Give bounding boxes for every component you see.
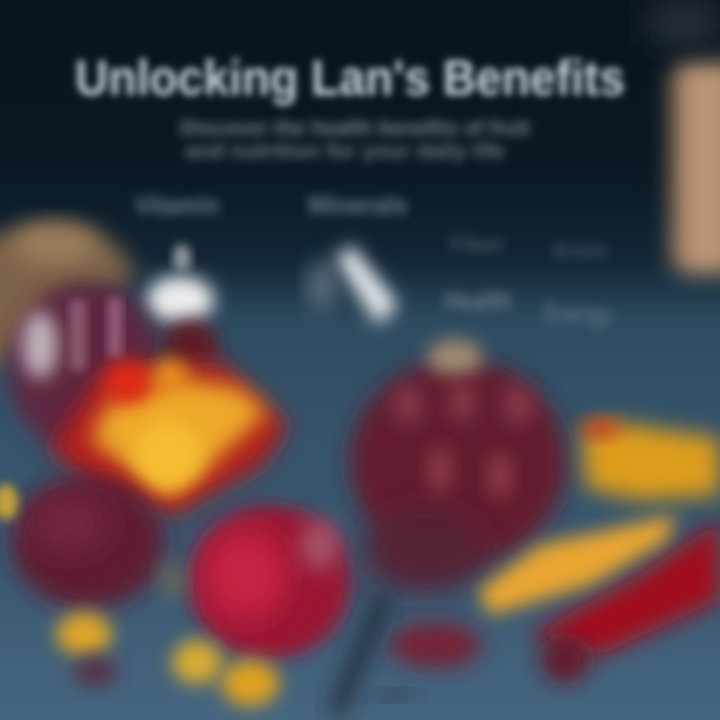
faint labels right: Energy [544,297,612,328]
white icons [146,244,398,325]
left tan object [0,222,132,380]
column labels [134,190,408,220]
faint labels right: Fiber [450,232,505,257]
subtitle: and nutrition for your daily life [185,140,505,163]
lower-left plum [12,476,164,608]
title: Unlocking Lan's Benefits [75,50,625,106]
column labels: Vitamin [134,190,220,220]
left mango slice [50,359,288,515]
top-left plum [9,283,218,453]
centre plum [190,506,350,658]
subtitle: Discover the health benefits of fruit [180,117,530,140]
right mango slices [478,418,720,682]
faint labels right: Health [444,285,512,316]
small berries and stem [335,595,481,715]
faint labels right [444,232,612,328]
right tan object [650,0,720,274]
faint labels right: Iron [552,238,608,263]
subtitle [180,117,530,163]
small yellow fruits [0,484,279,706]
column labels: Minerals [308,190,408,220]
large right plum [350,339,566,592]
